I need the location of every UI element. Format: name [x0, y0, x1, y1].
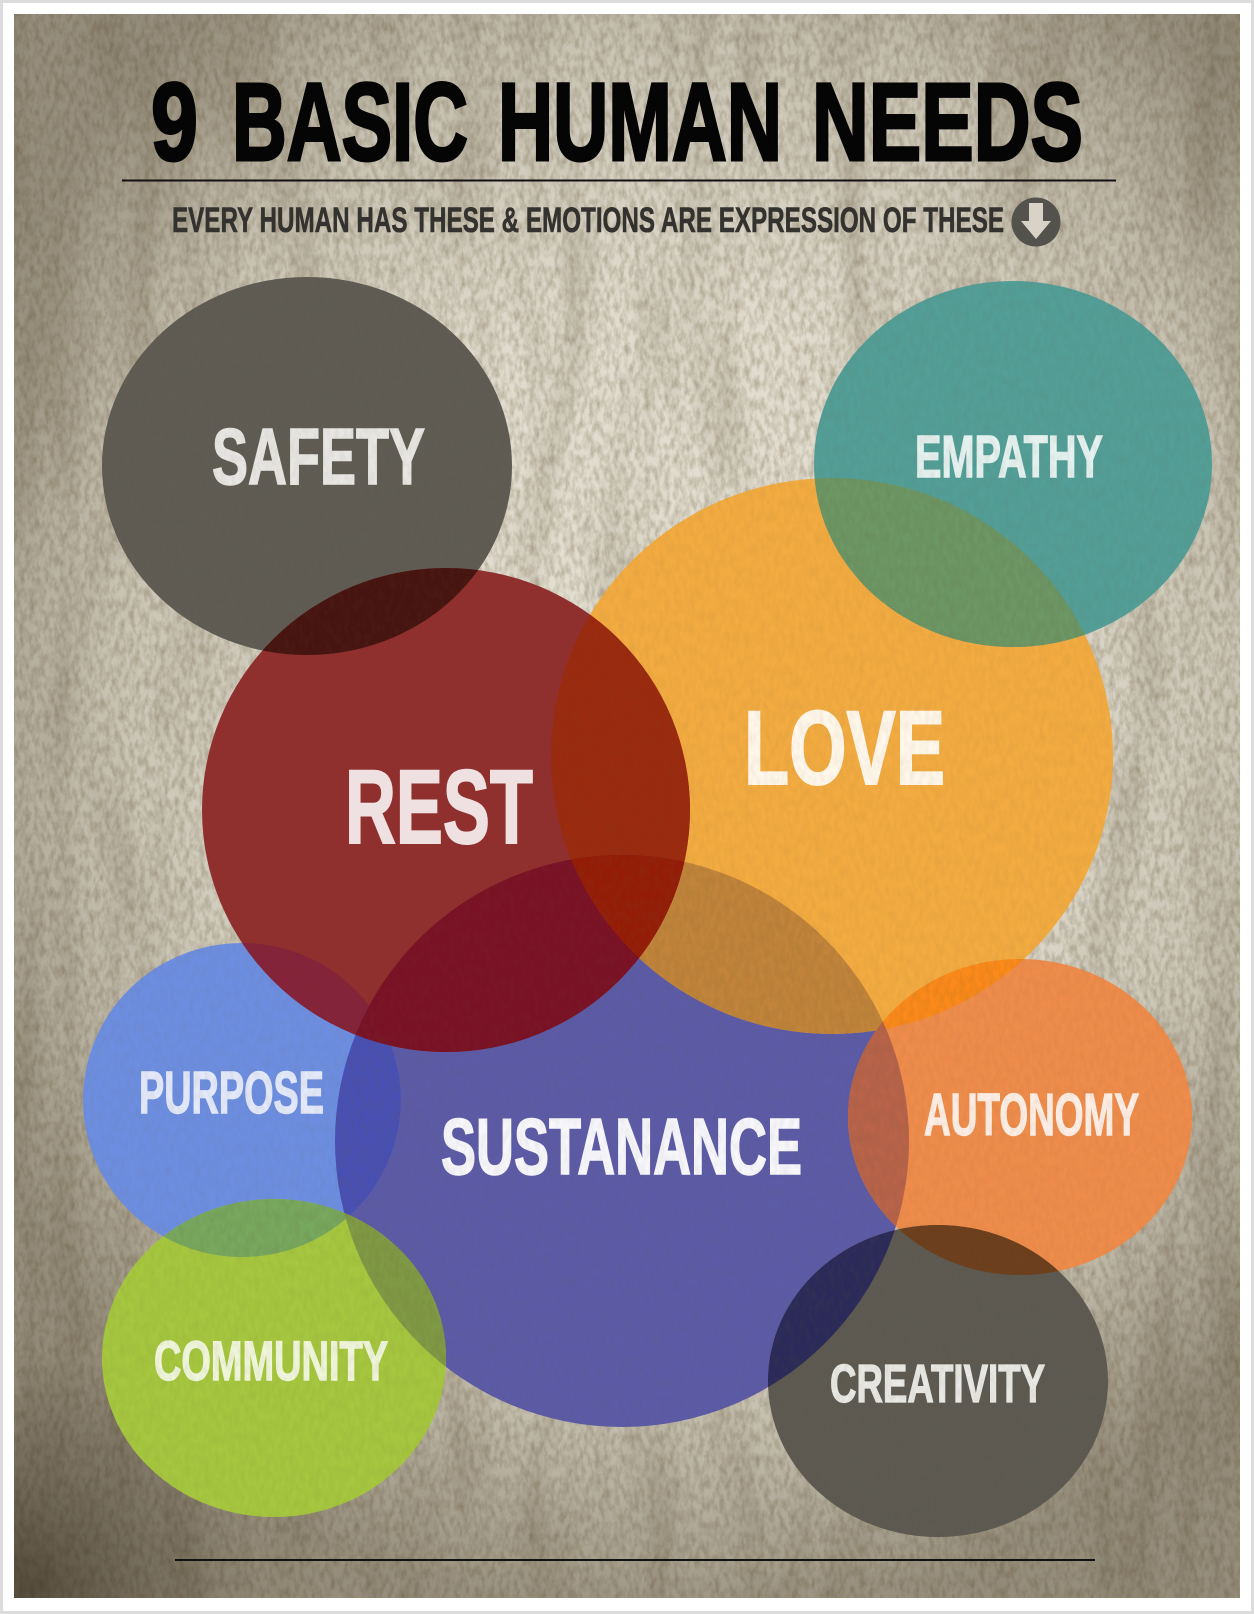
circle: purpose: [83, 943, 401, 1257]
circle: rest: [202, 568, 690, 1052]
label: sustanance: SUSTANANCE: [441, 1102, 802, 1191]
circle: empathy: [814, 281, 1212, 647]
label: rest: REST: [345, 749, 533, 866]
title: NEEDS: [812, 61, 1083, 184]
circle: community: [102, 1199, 446, 1517]
label: creativity: CREATIVITY: [830, 1354, 1045, 1414]
circle: safety: [102, 277, 512, 655]
label: love: LOVE: [744, 690, 945, 807]
title: HUMAN: [498, 61, 782, 184]
label: safety: SAFETY: [212, 412, 425, 501]
label: purpose: PURPOSE: [139, 1060, 324, 1126]
label: community: COMMUNITY: [154, 1329, 388, 1392]
label: empathy: EMPATHY: [915, 424, 1103, 490]
footer rule: [175, 1559, 1095, 1561]
title: BASIC: [232, 61, 468, 184]
circle: creativity: [768, 1225, 1108, 1537]
title rule: [122, 180, 1116, 182]
circle: autonomy: [848, 959, 1192, 1275]
title: [151, 61, 1083, 184]
circle: love: [551, 478, 1113, 1034]
texture over circles: [83, 284, 1191, 1506]
icon: down arrow in circle: [1012, 198, 1060, 246]
title: 9: [151, 61, 198, 184]
circle: sustanance: [335, 855, 909, 1427]
circle overlaps: [163, 478, 1085, 1388]
